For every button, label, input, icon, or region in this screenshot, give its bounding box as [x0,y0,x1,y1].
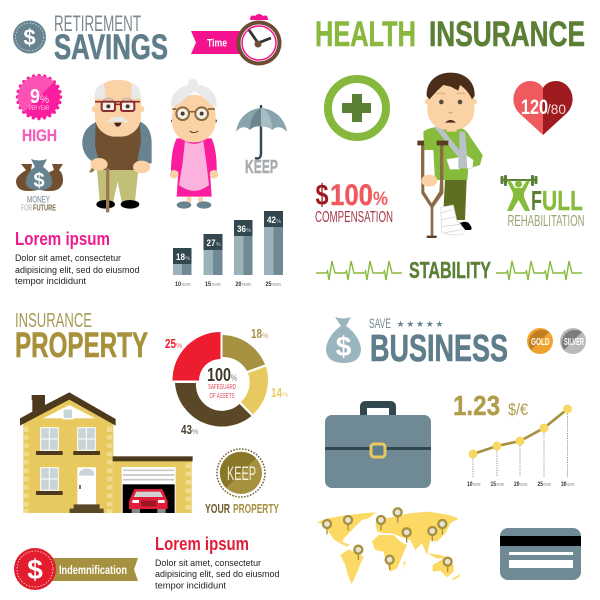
line chart: 10 [467,482,473,488]
line chart: YEARS [520,482,528,487]
donut chart: 43 [181,422,192,437]
icon: heart with blood pressure: 120 [521,96,548,119]
donut chart: % [176,343,182,350]
line chart: 20 [514,482,520,488]
badge: gold [527,328,553,354]
icon: weight lifter [500,175,538,211]
stat: full rehabilitation: ULL [542,185,583,216]
text block: adipisicing elit, sed do eiusmod [15,265,140,276]
line chart: YEARS [566,482,574,487]
label: save with stars [369,315,444,331]
label: money for future: MONEY [27,194,50,204]
icon: injured man [417,73,483,238]
text block: adipisicing elit, sed do eiusmod [155,569,280,580]
bar chart: savings growth: 25 [266,282,272,288]
heading: business: BUSINESS [370,328,508,370]
label: your property [205,501,279,516]
bar chart: savings growth: 36 [237,224,246,234]
icon: money bags [16,159,63,192]
heading: retirement savings [54,11,168,67]
text block: tempor incididunt [15,276,86,287]
heading: retirement savings: SAVINGS [54,28,168,67]
donut chart: % [192,429,198,436]
bar chart: savings growth: 10 [175,282,182,288]
icon: dollar badge: $ [23,25,36,50]
bar chart: savings growth: 15 [205,282,212,288]
badge: keep: KEEP [227,464,256,485]
label: high: HIGH [22,126,57,145]
ribbon: indemnification [14,548,138,590]
icon: money bag [326,317,361,363]
label: your property: PROPERTY [233,501,279,516]
badge: 9% per year: % [40,94,49,106]
line chart: 30 [561,482,567,488]
heading: retirement savings: RETIREMENT [54,11,141,36]
line chart: 25 [538,482,544,488]
icon: house with garage [20,392,193,513]
text block: Dolor sit amet, consectetur [155,558,261,569]
icon: heart with blood pressure: /80 [547,101,566,117]
donut chart: 14 [271,385,283,400]
stat: 100% compensation: COMPENSATION [315,209,393,226]
badge: 9% per year: 9 [30,86,40,108]
icon: dollar badge [13,20,46,54]
label: money for future: FUTURE [33,202,56,212]
line chart: YEARS [543,482,551,487]
stat: exchange rate: $/€ [508,400,528,419]
label: save with stars: SAVE [369,315,391,331]
stat: full rehabilitation [508,185,584,230]
ribbon: time [191,31,240,54]
text block: tempor incididunt [155,580,226,592]
icon: heart with blood pressure [513,81,573,135]
icon: umbrella [236,105,287,158]
line chart [467,404,574,488]
ribbon: indemnification: $ [27,554,43,585]
donut chart: OF ASSETS [210,391,234,400]
line chart: 15 [490,482,497,488]
label: save with stars: ★★★★★ [396,319,444,329]
heading: health insurance: HEALTH [315,15,416,54]
bar chart: savings growth: % [246,228,251,234]
bar chart: savings growth: 27 [206,238,216,248]
stat: full rehabilitation: F [531,185,542,216]
icon: medical cross [328,79,386,137]
heading: insurance property: PROPERTY [15,326,148,365]
donut chart: % [262,333,268,340]
bar chart: savings growth: YEARS [182,282,190,287]
icon: money bags: $ [33,170,45,192]
label: your property: YOUR [205,501,230,516]
bar chart: savings growth: 20 [236,282,242,288]
donut chart: 18 [251,326,262,341]
line chart: YEARS [496,482,504,487]
donut chart: % [231,373,237,383]
ribbon: indemnification: Indemnification [59,563,127,577]
stat: 100% compensation [315,179,393,226]
icon: briefcase [325,401,431,488]
ribbon: time: Time [207,38,227,50]
badge: silver [560,328,586,354]
label: money for future: FOR [21,202,32,212]
stat: 100% compensation: 100 [330,179,373,212]
bar chart: savings growth: 18 [176,252,185,262]
panel: health insurance [315,15,585,283]
panel: retirement savings [13,11,287,288]
donut chart [165,326,288,437]
donut chart: SAFEGUARD [208,382,236,391]
stat: exchange rate: 1.23 [453,390,500,421]
panel: save business [317,315,586,584]
bar chart: savings growth: % [276,219,281,225]
stability heartbeat line: STABILITY [409,257,491,283]
badge: keep [217,449,265,497]
bar chart: savings growth: YEARS [242,282,251,287]
badge: 9% per year: PER YEAR [29,106,49,112]
donut chart: 100 [207,365,231,385]
donut chart: 25 [165,336,176,351]
stat: 100% compensation: $ [316,179,329,212]
bar chart: savings growth: YEARS [272,282,281,287]
bar chart: savings growth: % [216,242,221,248]
bar chart: savings growth: 42 [267,215,276,225]
stat: 100% compensation: % [373,189,388,210]
heading: lorem ipsum: Lorem ipsum [155,534,249,554]
label: keep: KEEP [245,157,278,177]
line chart: YEARS [472,482,480,487]
text block [155,558,280,592]
heading: insurance property [15,310,148,365]
stability heartbeat line [316,257,582,283]
heading: insurance property: INSURANCE [15,310,92,332]
icon: stopwatch [236,14,282,66]
icon: grandmother [170,79,218,209]
badge: gold: GOLD [531,336,550,348]
label: money for future [21,194,56,212]
bar chart: savings growth [173,211,283,288]
heading: lorem ipsum: Lorem ipsum [15,229,110,249]
icon: grandfather [82,80,152,212]
badge: 9% per year [18,76,60,118]
heading: health insurance [315,15,585,54]
text block [15,253,140,287]
map: world with pins [317,508,460,584]
donut chart: % [282,392,288,399]
panel: insurance property [14,310,288,592]
icon: credit card [500,528,581,580]
bar chart: savings growth: YEARS [212,282,220,287]
icon: money bag: $ [336,331,352,362]
text block: Dolor sit amet, consectetur [15,253,121,264]
bar chart: savings growth: % [185,256,190,262]
